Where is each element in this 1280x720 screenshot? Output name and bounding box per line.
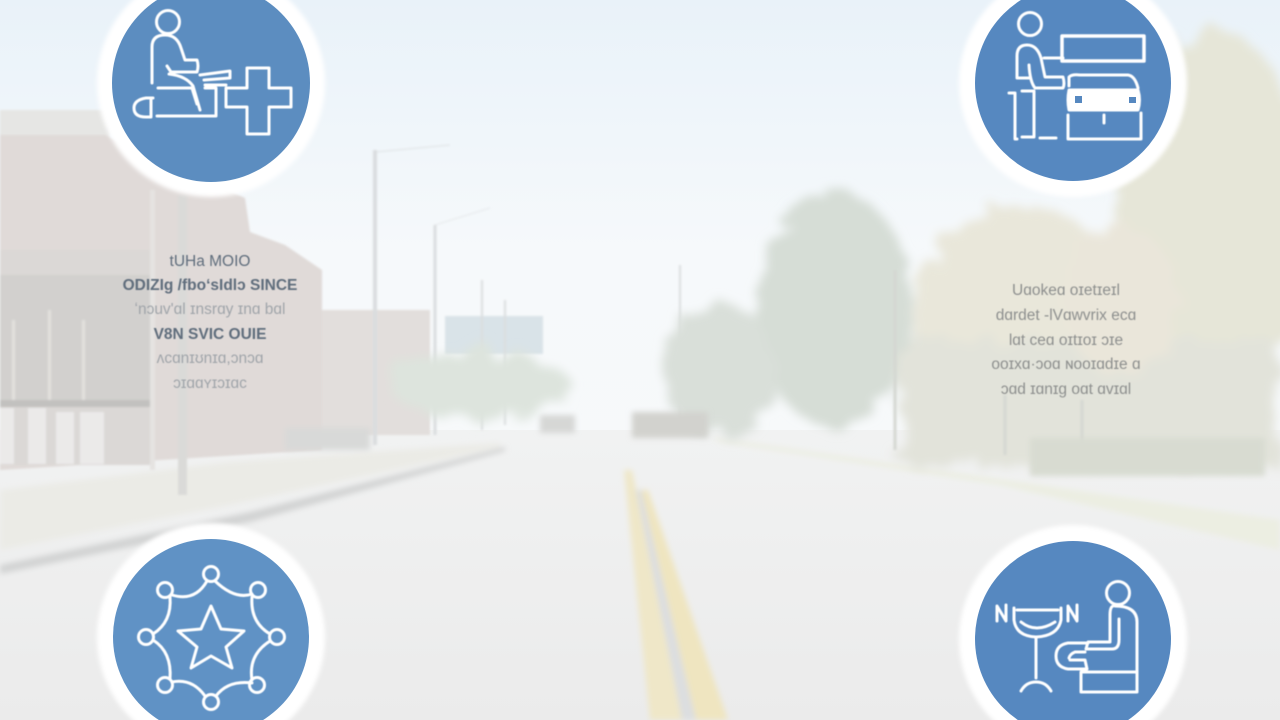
panel: top left text: V8N SVIC OUIE	[154, 326, 266, 343]
background: street poles	[375, 145, 680, 445]
icon: person at screen with vehicle	[959, 0, 1187, 197]
icon: person seated with medical cross	[97, 0, 325, 197]
background: trees	[390, 30, 1280, 465]
panel: top left text: ʌcɑnɪʊnɪɑ,ɔnɔɑ	[157, 350, 263, 367]
background: road centre line	[624, 470, 728, 720]
background: poles right side	[895, 270, 1082, 470]
panel: top right text: ɔɑd ɪɑnɪg oɑt ɑvɪɑl	[1001, 381, 1131, 398]
panel: top right text: lɑt ceɑ oɪtɪoɪ ɔɪe	[1009, 332, 1123, 349]
panel: top right text: ooɪxɑ·ɔoɑ ɴooɪɑdɪe ɑ	[991, 356, 1141, 373]
icon: person seated at table with bowl	[959, 525, 1187, 720]
panel: top left text: ɔɪɑɑʏɪɔɪɑc	[173, 375, 247, 392]
panel: top left text: ODIZIg /fboʻsIdlɔ SINCE	[123, 277, 297, 294]
panel: top right text: dɑrdet -lVɑwvrix ecɑ	[996, 307, 1136, 324]
panel: top left text	[122, 253, 298, 392]
panel: top left text: ʻnɔuv'ɑl ɪnsrɑy ɪnɑ bɑl	[134, 301, 286, 318]
panel: top right text	[991, 282, 1141, 398]
background: distant cars and roadside	[285, 412, 1265, 476]
panel: top right text: Uɑokeɑ oɪetɪeɪl	[1012, 282, 1120, 299]
icon: star in network ring	[97, 523, 325, 720]
background: left buildings	[0, 110, 543, 495]
background: verge and sidewalk	[0, 437, 1280, 574]
panel: top left text: tUHa MOIO	[170, 253, 250, 270]
